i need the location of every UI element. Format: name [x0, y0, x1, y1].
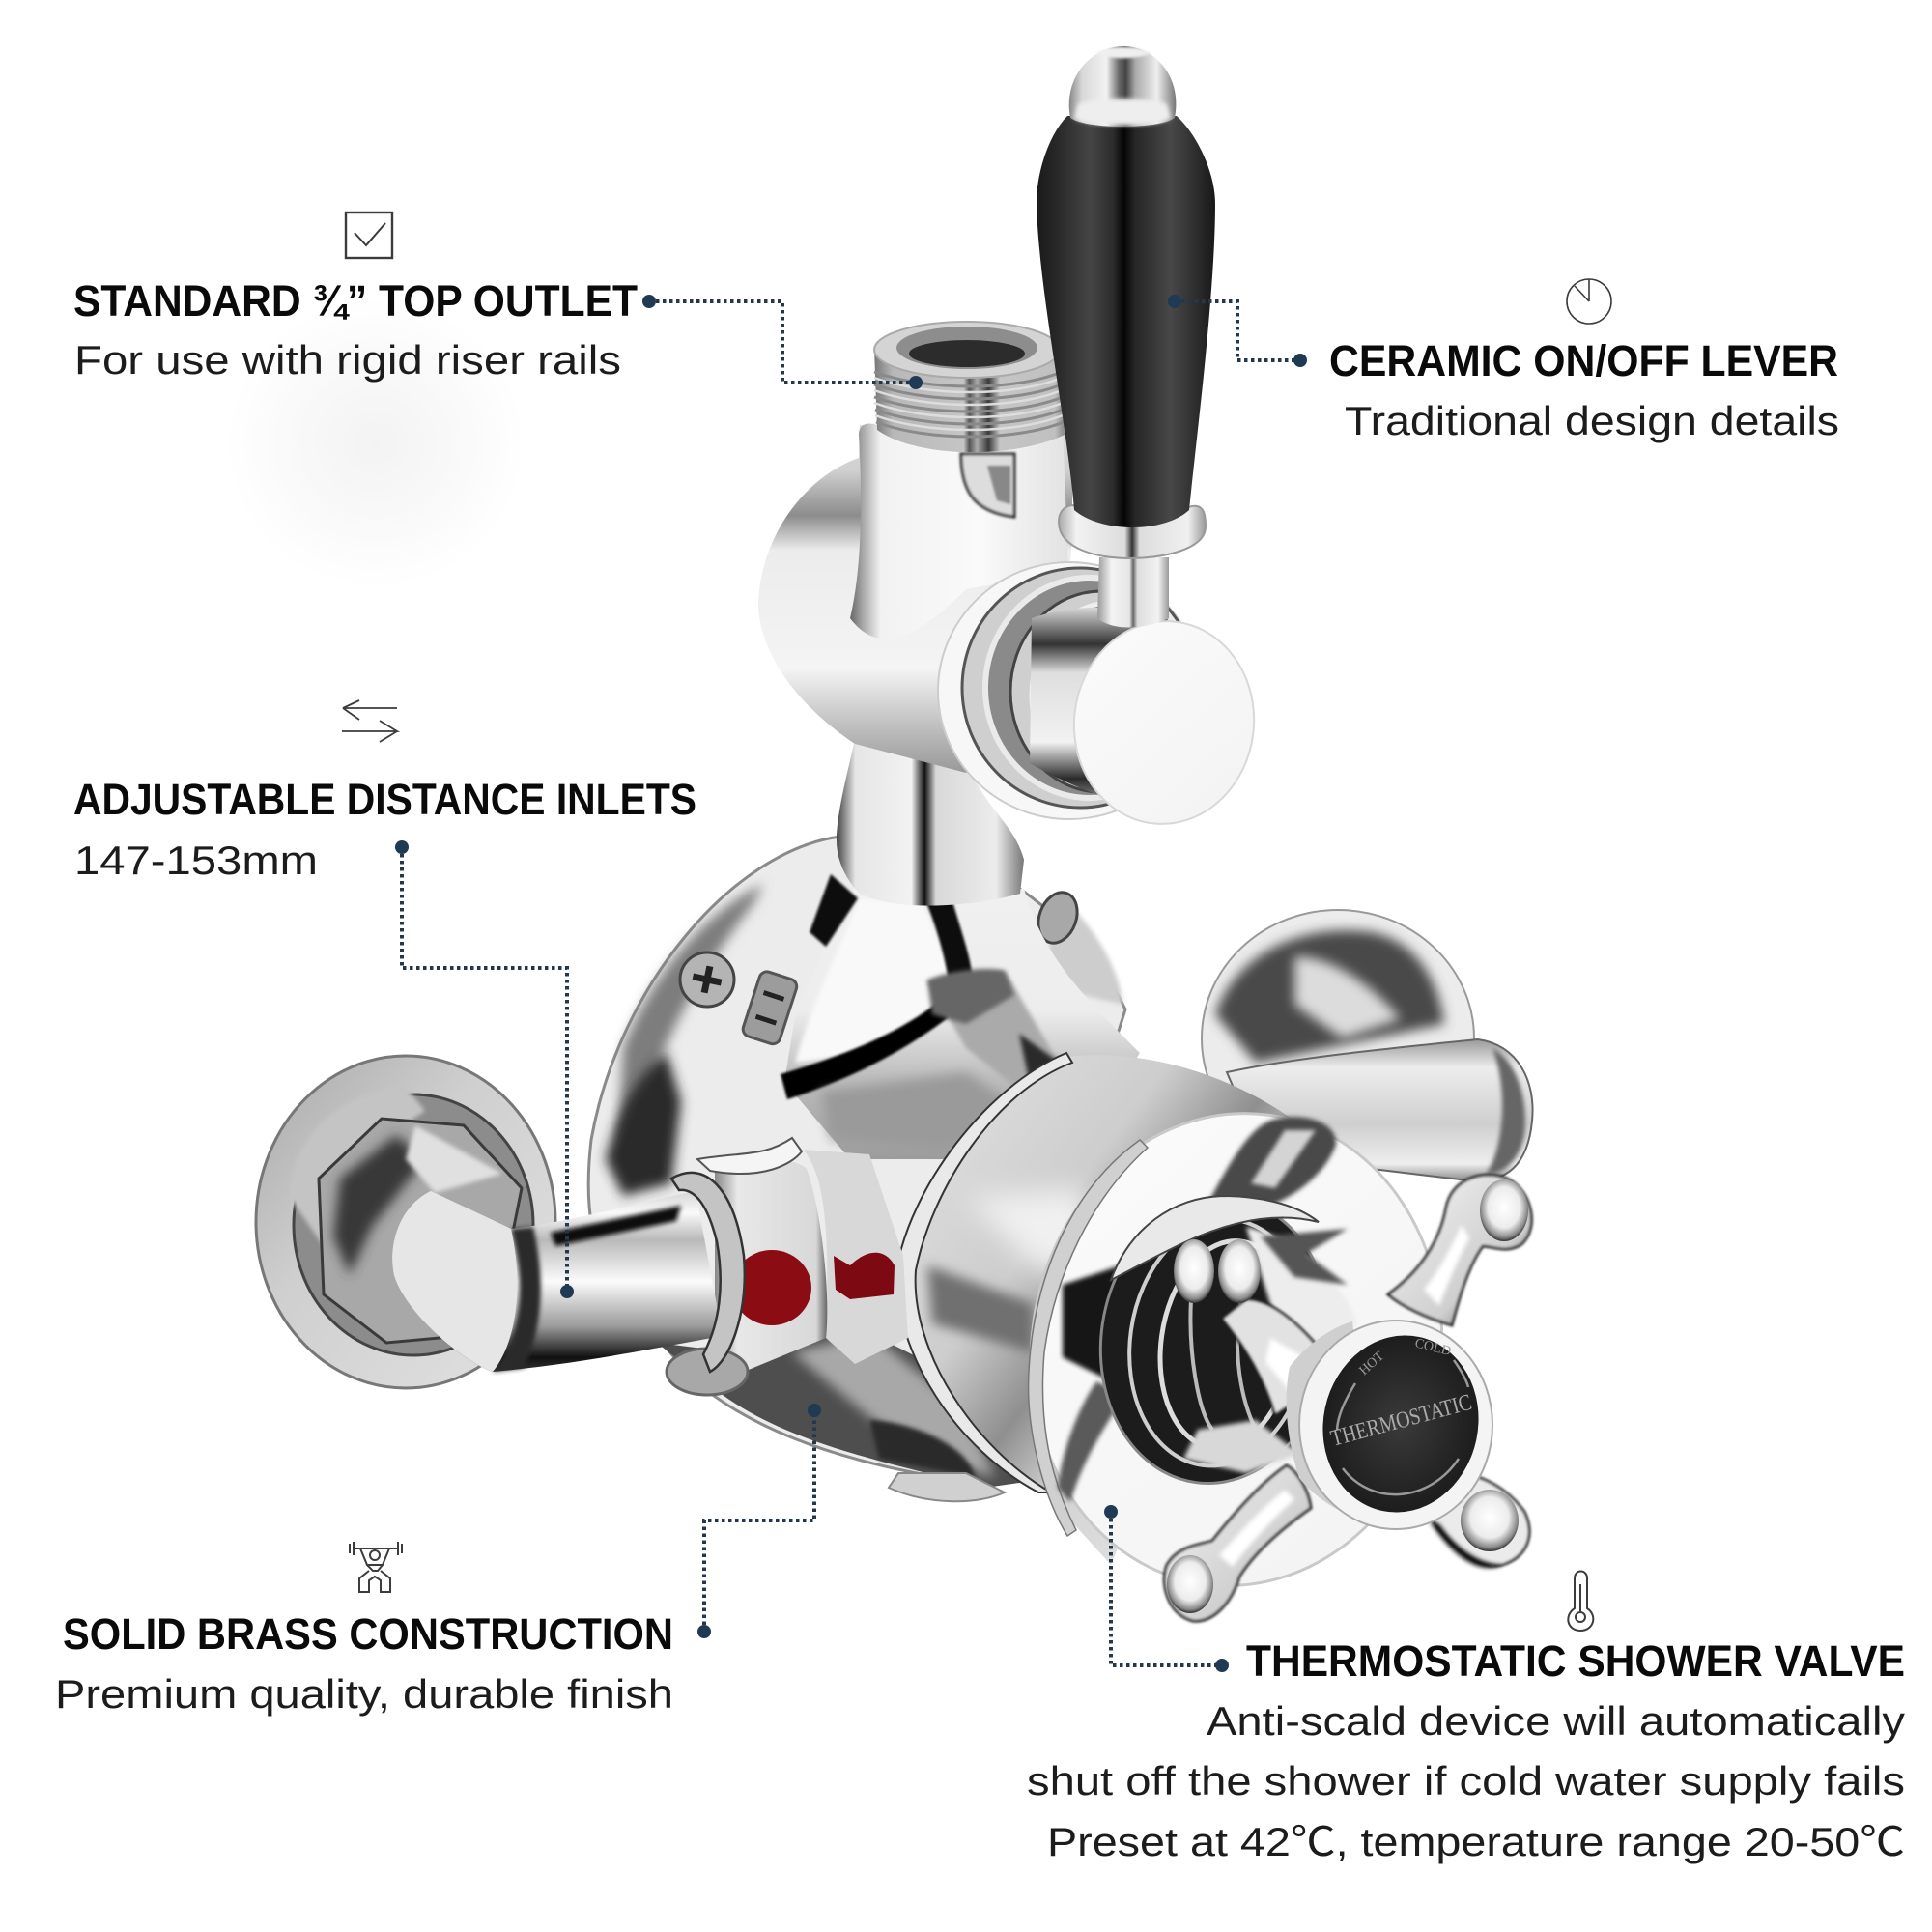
lever — [1037, 46, 1215, 627]
body text: 147-153mm — [74, 838, 318, 883]
outlet neck detail — [961, 454, 1014, 517]
heading: SOLID BRASS CONSTRUCTION — [63, 1609, 673, 1659]
thread — [874, 348, 1065, 452]
body line 2: shut off the shower if cold water supply fails — [1027, 1758, 1905, 1804]
stem — [1097, 557, 1169, 627]
icon: clock — [1567, 279, 1611, 324]
thermostatic cap: COLD — [1413, 1336, 1453, 1359]
handle arm upper right — [1388, 1175, 1531, 1325]
body line 3: Preset at 42 ℃, temperature range 20-50 ℃ — [1047, 1809, 1905, 1868]
callout: ceramic lever — [1168, 279, 1839, 443]
neck and flare — [781, 739, 1140, 1159]
upper column and threaded outlet — [758, 322, 1072, 773]
leader line — [1168, 295, 1307, 367]
leader line — [1104, 1505, 1229, 1672]
icon: weightlifter — [350, 1542, 402, 1592]
flange — [256, 1056, 555, 1388]
icon: arrows — [342, 700, 397, 742]
upper body — [758, 425, 1072, 773]
hub — [1063, 1183, 1357, 1498]
callout: solid brass — [55, 1404, 821, 1717]
cap dome — [1069, 46, 1176, 127]
screw — [680, 952, 734, 1007]
knob cylinder — [1030, 608, 1150, 811]
pipe — [392, 1191, 723, 1372]
handle arm lower left — [1164, 1465, 1311, 1621]
shower valve illustration — [256, 46, 1533, 1621]
background shadow — [226, 298, 526, 588]
tee body — [804, 1150, 908, 1364]
body line 1: Anti-scald device will automatically — [1207, 1698, 1905, 1744]
arm reflection left — [1058, 1381, 1125, 1502]
right inlet — [1202, 910, 1533, 1180]
face plate — [1001, 1087, 1531, 1621]
cap collar — [1287, 1321, 1377, 1526]
left inlet — [256, 1056, 908, 1395]
callout: thermostatic valve — [1027, 1505, 1905, 1868]
callout: standard top outlet — [73, 213, 923, 389]
collar — [1059, 505, 1206, 558]
thermostatic cap: HOT — [1357, 1349, 1387, 1378]
body text: Traditional design details — [1345, 398, 1839, 443]
handle arm upper left — [1174, 1239, 1323, 1415]
back plate — [588, 836, 1125, 1483]
heading: THERMOSTATIC SHOWER VALVE — [1246, 1636, 1905, 1686]
leader line — [395, 840, 574, 1298]
body text: Premium quality, durable finish — [55, 1671, 673, 1717]
light cone above cap — [1246, 1227, 1357, 1372]
handle arm lower right — [1430, 1475, 1529, 1568]
diagonal rod — [927, 969, 1159, 1159]
ring bottom — [667, 1349, 748, 1395]
pipe collar — [671, 1173, 745, 1372]
red marker side — [834, 1253, 895, 1299]
barrel — [896, 1053, 1294, 1565]
knob disc — [1065, 612, 1264, 833]
body text: For use with rigid riser rails — [74, 337, 621, 383]
hex nut — [319, 1119, 522, 1343]
heading: ADJUSTABLE DISTANCE INLETS — [73, 775, 696, 824]
icon: checkbox — [346, 213, 392, 258]
red marker hot — [732, 1250, 811, 1325]
handle — [1037, 116, 1215, 527]
icon: thermometer — [1568, 1571, 1593, 1631]
callout: adjustable inlets — [73, 700, 696, 1298]
heading: STANDARD ¾” TOP OUTLET — [73, 276, 638, 326]
leader line — [697, 1404, 821, 1638]
leader line — [642, 295, 923, 389]
thermostatic cap: THERMOSTATIC — [1328, 1390, 1474, 1452]
lower body — [657, 1323, 1053, 1501]
flange and rings — [938, 562, 1264, 833]
heading: CERAMIC ON/OFF LEVER — [1329, 336, 1838, 385]
thermostatic cap — [1299, 1321, 1494, 1529]
arm reflection top — [1203, 1117, 1336, 1212]
slot plate — [741, 970, 799, 1046]
